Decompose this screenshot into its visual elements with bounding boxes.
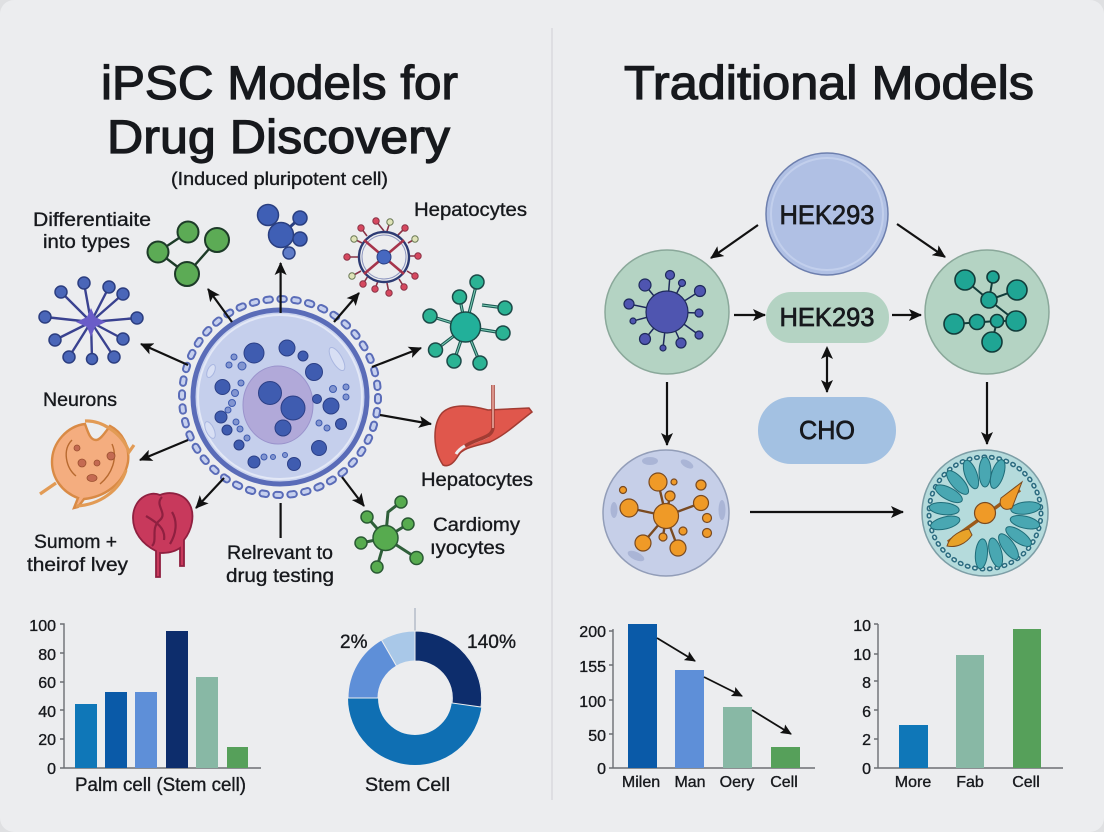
bar chart: stem cell: Palm cell (Stem cell) [75,775,246,796]
donut chart: stem cell: 2% [340,632,368,653]
labels around stem cell: Differentiaite [33,210,151,231]
icon: liver [435,385,532,466]
labels around stem cell: ıyocytes [430,538,505,559]
bar chart: stem cell: 100 [29,618,56,635]
panel: traditional models [579,56,1063,791]
bar chart: stem cell: 60 [38,675,56,692]
cell: green with purple molecule [605,250,729,374]
pill: CHO: CHO [799,415,855,445]
labels around stem cell: Cardiomy [433,515,521,536]
subtitle: (Induced pluripotent cell) [171,169,388,189]
donut chart: stem cell: Stem Cell [365,775,450,796]
bar chart: rising values: 10 [853,647,871,664]
arrows between cells [667,224,987,512]
bar chart: rising values: 8 [862,675,871,692]
bar chart: declining values [579,624,815,791]
cell: lilac with orange molecule [603,450,729,576]
bar chart: rising values: Fab [956,774,984,791]
bar chart: stem cell [29,618,261,796]
bar chart: declining values: Cell [770,774,798,791]
bar chart: declining values: 100 [579,694,606,711]
bar chart: rising values: 10 [853,618,871,635]
bar chart: declining values: Oery [720,774,754,791]
icon: green cardiomyocyte molecule [355,496,423,573]
title: iPSC models: iPSC Models for [101,56,458,109]
labels around stem cell: Hepatocytes [421,470,533,491]
pill: HEK293 [766,292,889,343]
bar chart: declining values: 0 [597,761,606,778]
bar chart: rising values: 2 [862,732,871,749]
icon: blue molecule [258,204,307,259]
pill: HEK293: HEK293 [780,302,874,332]
bar chart: declining values: 200 [579,624,606,641]
bar chart: declining values: 155 [579,659,606,676]
title: traditional models: Traditional Models [624,56,1034,109]
labels around stem cell: theirof lvey [27,555,129,576]
icon: teal molecule [423,275,512,370]
bar chart: stem cell: 20 [38,732,56,749]
pill: CHO [758,397,896,464]
bar chart: stem cell: 80 [38,647,56,664]
labels around stem cell [27,200,533,587]
bar chart: rising values: Cell [1012,774,1040,791]
labels around stem cell: drug testing [226,566,334,587]
bar chart: rising values [853,618,1063,791]
labels around stem cell: into types [43,232,130,253]
labels around stem cell: Neurons [43,390,117,411]
bar chart: declining values: Man [674,774,706,791]
labels around stem cell: Hepatocytes [414,200,527,221]
icon: green molecule [148,222,229,286]
arrows from stem cell [140,263,431,538]
icon: red organ [133,493,192,577]
title: iPSC models: Drug Discovery [107,110,451,163]
bar chart: declining values: 50 [588,728,606,745]
bar chart: rising values: 0 [862,761,871,778]
cell: teal with dotted ring and orange spindle [922,450,1048,576]
bar chart: declining values: Milen [622,774,660,791]
donut chart: stem cell: 140% [467,632,516,653]
title: iPSC models [101,56,458,163]
labels around stem cell: Sumom + [34,532,117,553]
panel: iPSC models [27,56,533,796]
cell: green with teal molecule [925,250,1049,374]
labels around stem cell: Relrevant to [227,543,333,564]
bar chart: rising values: More [895,774,931,791]
donut chart: stem cell [340,608,516,796]
icon: kidney cross-section [40,421,134,508]
icon: spoked wheel cell [344,218,421,296]
node: HEK293 top cell: HEK293 [780,200,874,230]
central stem cell [182,299,378,495]
icon: neuron [39,277,143,364]
bar chart: stem cell: 40 [38,704,56,721]
node: HEK293 top cell [766,153,888,275]
bar chart: stem cell: 0 [47,761,56,778]
bar chart: rising values: 6 [862,704,871,721]
